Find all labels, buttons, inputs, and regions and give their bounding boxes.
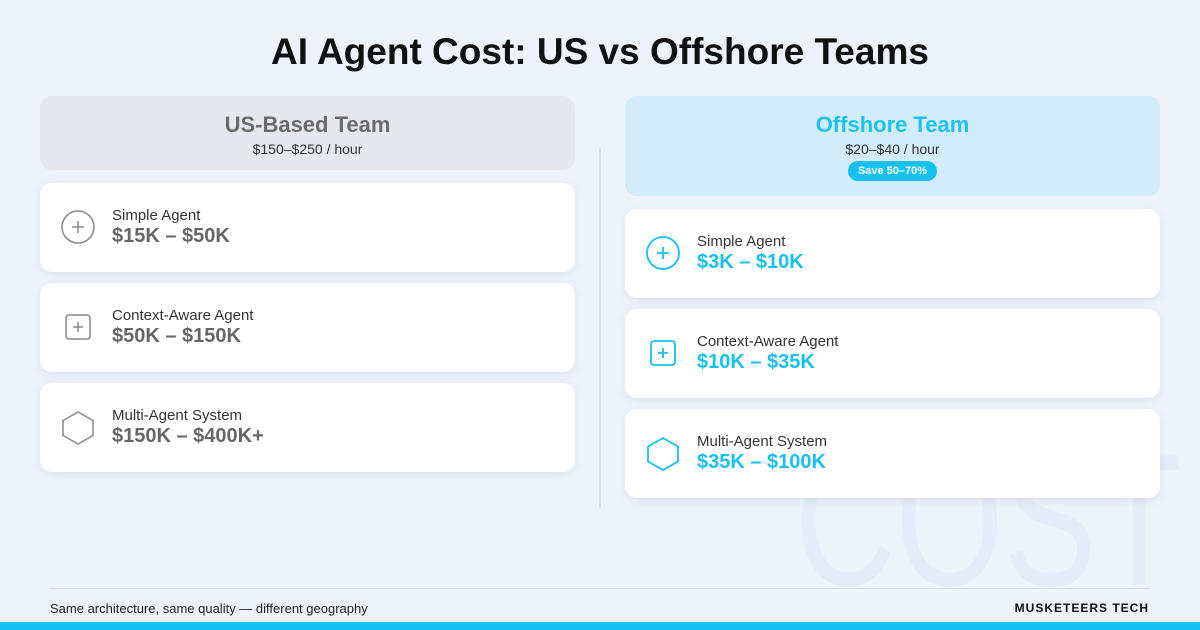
card: US multi: $150K – $400K+ — [112, 425, 264, 447]
card: Offshore context: Context-Aware Agent — [697, 333, 838, 350]
card: US simple: $15K – $50K — [112, 225, 230, 247]
footer rule — [50, 588, 1150, 589]
footer tagline: Same architecture, same quality — different geography — [50, 601, 368, 616]
card: Offshore simple — [625, 209, 1160, 298]
badge: Save 50–70% — [858, 165, 927, 177]
panel: US header: US-Based Team — [225, 112, 390, 137]
card: US simple: Simple Agent — [112, 207, 200, 224]
panel: Offshore header: $20–$40 / hour — [845, 141, 940, 157]
panel: US header — [40, 96, 575, 170]
card: US context: $50K – $150K — [112, 325, 241, 347]
panel: US header: $150–$250 / hour — [253, 141, 362, 157]
panel: Offshore header: Offshore Team — [816, 112, 969, 137]
icon: circle plus — [61, 210, 95, 244]
title: AI Agent Cost: US vs Offshore Teams — [271, 31, 929, 72]
card: Offshore multi: Multi-Agent System — [697, 433, 827, 450]
footer brand: MUSKETEERS TECH — [1015, 601, 1149, 615]
card: Offshore context — [625, 309, 1160, 398]
card: Offshore simple: $3K – $10K — [697, 251, 804, 273]
icon: hexagon — [647, 437, 679, 471]
watermark: COST — [795, 415, 1181, 625]
card: US simple — [40, 183, 575, 272]
icon: square plus — [650, 340, 676, 366]
card: US context: Context-Aware Agent — [112, 307, 253, 324]
icon: square plus — [65, 314, 91, 340]
icon: hexagon — [62, 411, 94, 445]
badge — [848, 161, 937, 181]
card: Offshore multi: $35K – $100K — [697, 451, 826, 473]
divider — [599, 148, 601, 508]
bottom bar — [0, 622, 1200, 630]
card: US multi: Multi-Agent System — [112, 407, 242, 424]
panel: Offshore header — [625, 96, 1160, 196]
card: US context — [40, 283, 575, 372]
card: Offshore multi — [625, 409, 1160, 498]
card: US multi — [40, 383, 575, 472]
icon: circle plus — [646, 236, 680, 270]
card: Offshore simple: Simple Agent — [697, 233, 785, 250]
card: Offshore context: $10K – $35K — [697, 351, 815, 373]
